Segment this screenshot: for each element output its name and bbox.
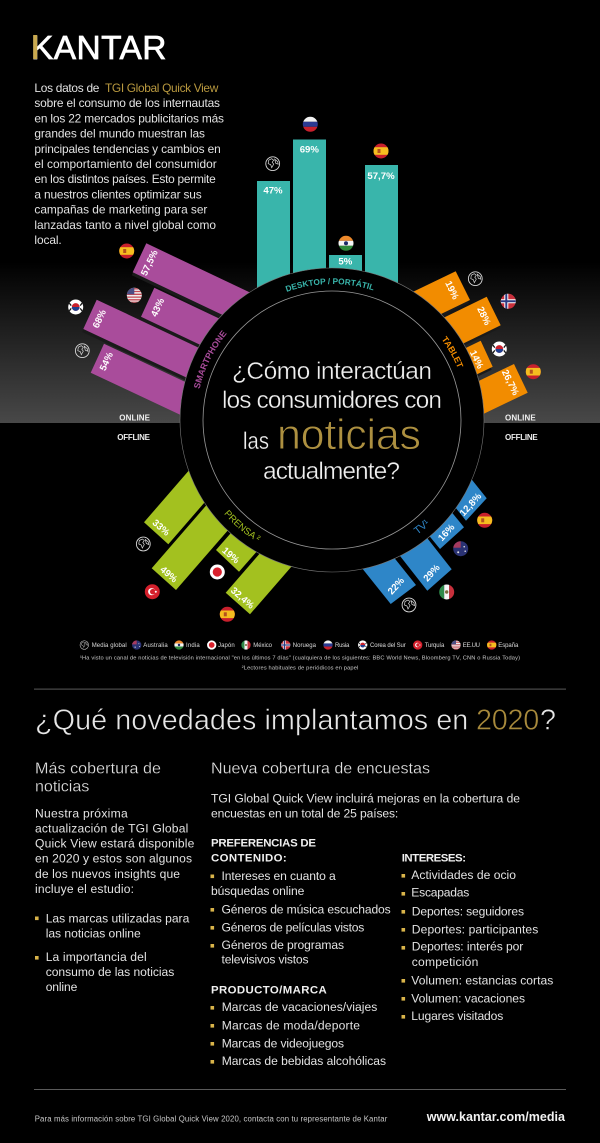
intro text block: sobre el consumo de los internautas	[34, 96, 220, 110]
intro text block	[34, 81, 224, 247]
central question title: ¿Cómo interactúan	[232, 358, 432, 385]
list: producto / marca: Marcas de videojuegos	[222, 1037, 344, 1051]
intro text block: lanzadas tanto a nivel global como	[34, 218, 216, 232]
tablet values: 19%	[442, 279, 461, 302]
list: intereses: Escapadas	[411, 886, 469, 900]
list: preferencias de contenido: PREFERENCIAS DE	[211, 838, 316, 850]
footer url: www.kantar.com/media	[426, 1110, 566, 1124]
footer note: Para más información sobre TGI Global Quick View 2020, contacta con tu representante de Kantar	[35, 1115, 388, 1124]
footnotes: ¹Ha visto un canal de noticias de televisión internacional "en los últimos 7 días" (cualquiera de los siguientes: BBC World News, Bloomberg TV, CNN o Russia Today)	[80, 656, 520, 662]
intro text block: Los datos de	[34, 81, 100, 95]
tablet values: 26,7%	[499, 368, 521, 398]
desktop values	[263, 144, 395, 268]
left column: más cobertura de noticias: Las marcas utilizadas para	[46, 912, 190, 926]
left column: más cobertura de noticias: noticias	[35, 778, 89, 796]
prensa values: 49%	[157, 564, 180, 586]
section heading: ¿Qué novedades implantamos en	[35, 704, 468, 736]
online / offline labels left: ONLINE	[119, 414, 151, 422]
list: preferencias de contenido: televisivos vistos	[222, 952, 308, 966]
left column: más cobertura de noticias: en 2020 y estos son algunos	[35, 852, 192, 866]
legend: Media global	[92, 643, 127, 649]
intro text block: TGI Global Quick View	[105, 81, 219, 95]
list: intereses	[402, 853, 553, 1023]
right column: intro: TGI Global Quick View incluirá mejoras en la cobertura de	[211, 791, 520, 805]
right column: intro: encuestas en un total de 25 países:	[211, 806, 398, 820]
footnotes: ²Lectores habituales de periódicos en papel	[242, 666, 358, 672]
legend: EE.UU	[463, 643, 480, 649]
intro text block: en los 22 mercados publicitarios más	[34, 111, 224, 125]
smartphone values: 43%	[149, 296, 167, 319]
prensa values: 19%	[219, 545, 242, 567]
intro text block: el comportamiento del consumidor	[34, 157, 217, 171]
list: intereses: competición	[412, 955, 478, 969]
tablet values	[442, 279, 521, 398]
smartphone values: 57,5%	[139, 248, 161, 278]
left column: más cobertura de noticias: Nuestra próxima	[35, 806, 128, 820]
central question title: los consumidores con	[222, 387, 442, 414]
legend: India	[186, 643, 200, 649]
online / offline labels right: OFFLINE	[505, 433, 538, 442]
central question title: las	[243, 428, 269, 455]
legend	[80, 640, 519, 650]
bars: smartphone	[83, 243, 274, 453]
desktop values: 5%	[338, 256, 353, 268]
prensa values: 33%	[150, 518, 172, 539]
list: intereses: Volumen: vacaciones	[411, 991, 525, 1005]
central ring	[180, 268, 484, 572]
legend: Corea del Sur	[370, 643, 406, 649]
list: preferencias de contenido: búsquedas online	[211, 884, 305, 898]
TV values: 12,8%	[458, 491, 485, 519]
intro text block: grandes del mundo muestran las	[34, 127, 205, 141]
ring label: tablet: TABLET	[442, 336, 464, 367]
legend: España	[498, 643, 519, 649]
list: intereses: Deportes: participantes	[412, 922, 538, 936]
smartphone values	[91, 248, 167, 373]
smartphone values: 68%	[91, 308, 109, 330]
logo: Kantar: KANTAR	[31, 30, 166, 67]
legend: Rusia	[335, 643, 350, 649]
intro text block: en los distintos países. Esto permite	[34, 172, 216, 186]
list: producto / marca: Marcas de moda/deporte	[222, 1018, 360, 1032]
list: preferencias de contenido	[210, 838, 391, 966]
legend: Turquía	[425, 643, 445, 649]
intro text block: a nuestros clientes optimizar sus	[34, 187, 202, 201]
section heading: ?	[540, 704, 556, 736]
tablet values: 28%	[474, 305, 493, 328]
online / offline labels left	[117, 414, 151, 442]
TV values	[386, 491, 485, 597]
central question title	[222, 358, 442, 485]
TV values: 16%	[436, 522, 458, 544]
list: intereses: Deportes: seguidores	[412, 905, 524, 919]
smartphone values: 54%	[98, 350, 116, 373]
list: producto / marca: PRODUCTO/MARCA	[211, 984, 327, 996]
list: producto / marca	[210, 984, 386, 1068]
online / offline labels right: ONLINE	[505, 414, 536, 422]
bars: TV	[331, 448, 487, 604]
intro text block: principales tendencias y cambios en	[34, 142, 221, 156]
left column: más cobertura de noticias: La importancia del	[46, 950, 147, 964]
list: intereses: Volumen: estancias cortas	[411, 973, 553, 987]
intro text block: campañas de marketing para ser	[34, 203, 207, 217]
bars: desktop / portátil	[257, 140, 398, 301]
left column: más cobertura de noticias: de los nuevos insights que	[35, 867, 180, 881]
left column: más cobertura de noticias: Quick View estará disponible	[35, 837, 195, 851]
list: intereses: Deportes: interés por	[412, 940, 523, 954]
bars: tablet	[396, 271, 528, 441]
legend: Japón	[218, 643, 235, 649]
list: preferencias de contenido: Géneros de programas	[222, 938, 344, 952]
list: intereses: Actividades de ocio	[411, 868, 516, 882]
online background band	[0, 262, 600, 423]
list: preferencias de contenido: Géneros de música escuchados	[222, 902, 391, 916]
left column: más cobertura de noticias	[35, 759, 195, 994]
ring label: TV: TV¹	[413, 520, 428, 534]
left column: más cobertura de noticias: actualización de TGI Global	[35, 822, 188, 836]
ring label: desktop / portátil: DESKTOP / PORTÁTIL	[285, 278, 374, 292]
list: intereses: INTERESES:	[402, 853, 466, 865]
list: preferencias de contenido: Géneros de películas vistos	[222, 921, 364, 935]
desktop values: 57,7%	[367, 171, 395, 182]
left column: más cobertura de noticias: online	[46, 980, 78, 994]
legend: Noruega	[293, 643, 317, 649]
list: preferencias de contenido: Intereses en cuanto a	[222, 869, 336, 883]
legend: México	[253, 643, 273, 649]
footnotes	[80, 656, 520, 672]
list: preferencias de contenido: CONTENIDO:	[211, 853, 287, 865]
ring label: smartphone: SMARTPHONE	[194, 330, 227, 388]
central question title: actualmente?	[263, 458, 400, 485]
section heading: 2020	[476, 704, 539, 736]
central question title: noticias	[277, 411, 421, 459]
right column: intro: Nueva cobertura de encuestas	[211, 759, 430, 777]
list: producto / marca: Marcas de vacaciones/viajes	[222, 1000, 377, 1014]
right column: intro	[211, 759, 520, 820]
legend: Australia	[143, 643, 168, 649]
list: intereses: Lugares visitados	[411, 1009, 503, 1023]
online / offline labels right	[505, 414, 538, 442]
bars: prensa	[144, 453, 310, 614]
left column: más cobertura de noticias: consumo de las noticias	[46, 965, 174, 979]
prensa values	[150, 518, 256, 612]
left column: más cobertura de noticias: incluye el estudio:	[35, 882, 134, 896]
intro text block: local.	[34, 233, 62, 247]
left column: más cobertura de noticias: las noticias online	[46, 927, 141, 941]
prensa values: 32,4%	[228, 585, 256, 612]
desktop values: 47%	[263, 186, 283, 196]
tablet values: 14%	[467, 349, 485, 371]
flags and icons around the bars	[68, 116, 541, 622]
left column: más cobertura de noticias: Más cobertura de	[35, 759, 161, 777]
TV values: 29%	[422, 562, 443, 584]
list: producto / marca: Marcas de bebidas alcohólicas	[222, 1054, 386, 1068]
ring label: prensa: PRENSA ²	[224, 510, 261, 540]
online / offline labels left: OFFLINE	[117, 433, 151, 442]
TV values: 22%	[386, 575, 407, 597]
desktop values: 69%	[300, 144, 319, 156]
